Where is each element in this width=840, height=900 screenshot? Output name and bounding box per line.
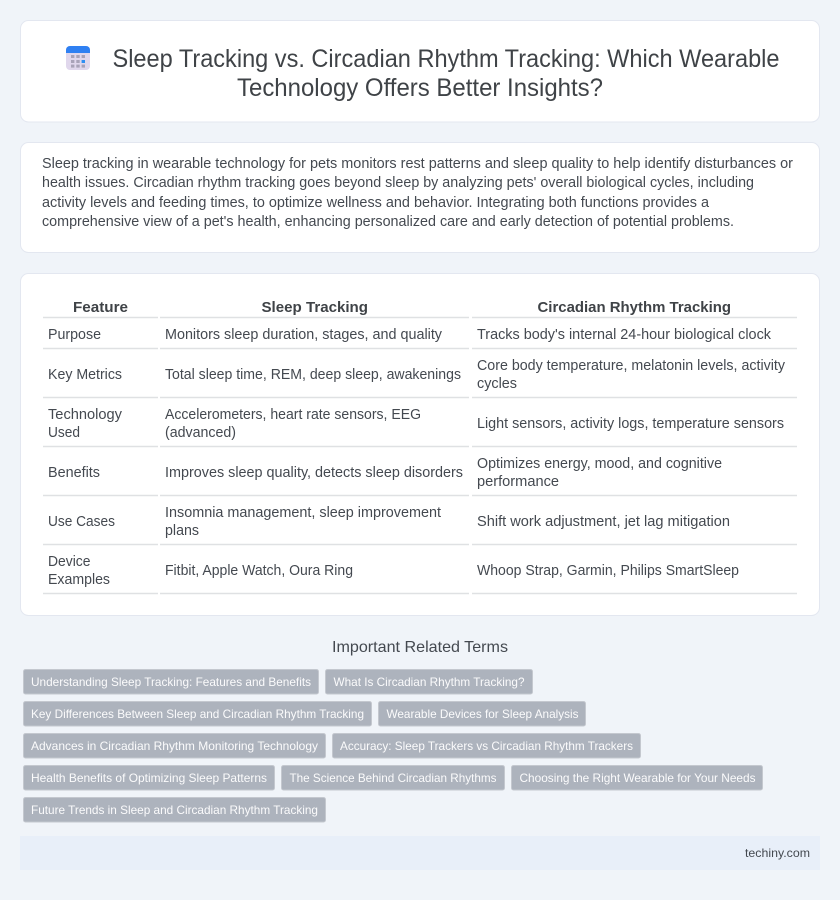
row: device examples bbox=[48, 554, 739, 588]
row: device examples: Fitbit, Apple Watch, Oura Ring bbox=[165, 563, 353, 579]
table header: Sleep Tracking bbox=[262, 299, 368, 316]
related terms chips: The Science Behind Circadian Rhythms bbox=[290, 771, 496, 785]
row: technology used: (advanced) bbox=[165, 425, 236, 441]
row: technology used: Accelerometers, heart rate sensors, EEG bbox=[165, 407, 421, 423]
related terms chips: Advances in Circadian Rhythm Monitoring Technology bbox=[31, 739, 318, 753]
row: purpose: Tracks body's internal 24-hour biological clock bbox=[477, 327, 772, 343]
row: use cases: plans bbox=[165, 523, 199, 539]
row: technology used: Light sensors, activity logs, temperature sensors bbox=[477, 416, 784, 432]
text block: introduction bbox=[42, 156, 793, 230]
panel: header bbox=[20, 20, 820, 122]
text block: introduction: comprehensive view of a pet's health, enhancing personalized care and early detection of potential problems. bbox=[42, 214, 734, 230]
icon: calendar bbox=[66, 46, 90, 70]
related terms chips: What Is Circadian Rhythm Tracking? bbox=[334, 675, 525, 689]
related terms chips bbox=[24, 670, 762, 822]
row: key metrics: Key Metrics bbox=[48, 367, 122, 383]
row: purpose: Monitors sleep duration, stages, and quality bbox=[165, 327, 443, 343]
text block: introduction: health issues. Circadian rhythm tracking goes beyond sleep by analyzing pets' overall biological cycles, including bbox=[42, 175, 754, 191]
row: key metrics: Total sleep time, REM, deep sleep, awakenings bbox=[165, 367, 461, 383]
related terms chips: Key Differences Between Sleep and Circadian Rhythm Tracking bbox=[31, 707, 364, 721]
text block: introduction: activity levels and feeding times, to optimize wellness and behavior. Integrating both functions provides a bbox=[42, 195, 709, 211]
row: benefits bbox=[48, 456, 722, 490]
row: benefits: Benefits bbox=[48, 465, 100, 481]
row: benefits: Optimizes energy, mood, and cognitive bbox=[477, 456, 722, 472]
row: device examples: Device bbox=[48, 554, 90, 570]
row: device examples: Whoop Strap, Garmin, Philips SmartSleep bbox=[477, 563, 739, 579]
row: technology used: Used bbox=[48, 425, 80, 441]
related terms chips: Future Trends in Sleep and Circadian Rhythm Tracking bbox=[31, 803, 318, 817]
row: use cases: Use Cases bbox=[48, 514, 115, 530]
row: benefits: performance bbox=[477, 474, 559, 490]
related terms chips: Understanding Sleep Tracking: Features and Benefits bbox=[31, 675, 311, 689]
row: benefits: Improves sleep quality, detects sleep disorders bbox=[165, 465, 463, 481]
row: key metrics: cycles bbox=[477, 376, 517, 392]
row: use cases: Shift work adjustment, jet lag mitigation bbox=[477, 514, 730, 530]
footer: techiny.com bbox=[745, 846, 810, 860]
row: key metrics: Core body temperature, melatonin levels, activity bbox=[477, 358, 786, 374]
panel: introduction bbox=[20, 142, 820, 252]
text block: introduction: Sleep tracking in wearable technology for pets monitors rest patterns and sleep quality to help identify disturbances or bbox=[42, 156, 793, 172]
row: device examples: Examples bbox=[48, 572, 110, 588]
footer bbox=[20, 836, 820, 870]
row: key metrics bbox=[48, 358, 786, 392]
title: Technology Offers Better Insights? bbox=[237, 74, 603, 102]
row: technology used bbox=[48, 407, 784, 441]
title bbox=[112, 45, 780, 102]
row: purpose: Purpose bbox=[48, 327, 101, 343]
heading: important related terms: Important Related Terms bbox=[332, 639, 508, 656]
related terms chips: Health Benefits of Optimizing Sleep Patterns bbox=[31, 771, 267, 785]
row: use cases bbox=[48, 505, 730, 539]
table header bbox=[73, 299, 731, 316]
title: Sleep Tracking vs. Circadian Rhythm Tracking: Which Wearable bbox=[112, 45, 780, 73]
row: technology used: Technology bbox=[48, 407, 123, 423]
table header: Circadian Rhythm Tracking bbox=[538, 299, 731, 316]
related terms chips: Wearable Devices for Sleep Analysis bbox=[386, 707, 578, 721]
panel: comparison table bbox=[20, 274, 820, 616]
related terms chips: Accuracy: Sleep Trackers vs Circadian Rhythm Trackers bbox=[340, 739, 633, 753]
related terms chips: Choosing the Right Wearable for Your Needs bbox=[520, 771, 756, 785]
table header: Feature bbox=[73, 299, 128, 316]
row: purpose bbox=[48, 327, 772, 343]
row: use cases: Insomnia management, sleep improvement bbox=[165, 505, 441, 521]
